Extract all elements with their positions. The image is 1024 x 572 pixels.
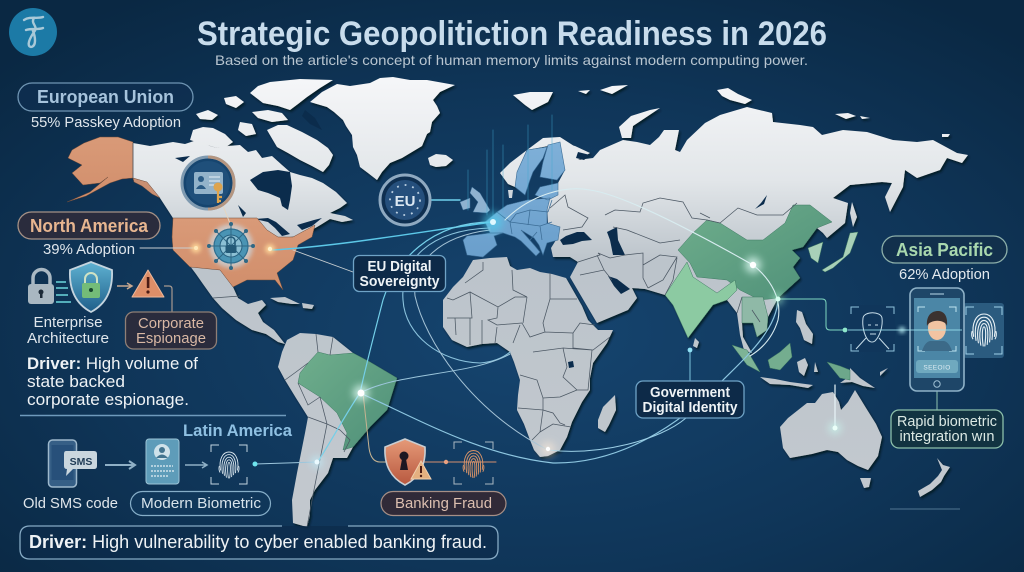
text: North America driver: corporate espionage. (27, 390, 189, 409)
stat: 62% Adoption: 62% Adoption (899, 266, 990, 283)
subtitle: Based on the article's concept of human memory limits against modern computing power. (215, 52, 808, 68)
borders: Europe (490, 200, 552, 240)
icon: EU badge: EU (395, 193, 415, 210)
land: Africa (443, 257, 613, 457)
highlighted regions (67, 137, 315, 290)
node: South China (773, 294, 783, 304)
line: North America to EU (272, 222, 492, 250)
land: South America (278, 333, 397, 527)
land: Arctic islands (190, 79, 333, 172)
box: Rapid biometric integration: Rapid biometric (897, 413, 997, 430)
water: Kola White Sea (576, 152, 590, 160)
water: Lake Baikal (755, 195, 767, 209)
node: face scan dot (843, 328, 847, 332)
region: European Union (463, 142, 565, 257)
region: Sumatra (732, 345, 760, 372)
panel: Latin America (20, 421, 506, 559)
water overlays (175, 110, 767, 368)
region: Borneo (768, 343, 792, 370)
pill: Banking Fraud (381, 492, 506, 516)
node: China (745, 257, 761, 273)
node: South Africa (541, 442, 555, 456)
box: Corporate Espionage: Corporate (138, 315, 204, 332)
land: Canada (133, 140, 353, 237)
box: Rapid biometric integration: integration wın (900, 428, 994, 445)
land: Mexico and Central America (190, 266, 285, 344)
water: Persian Gulf (608, 276, 630, 294)
line: Government Digital Identity to dot (689, 350, 691, 381)
label: Old SMS code: Old SMS code (23, 495, 118, 512)
region: India (665, 262, 737, 338)
line: EU badge to EU (430, 199, 460, 201)
water: Arctic channels (175, 110, 322, 184)
icon: EU badge (380, 175, 430, 225)
stat: 39% Adoption: 39% Adoption (43, 241, 135, 258)
line: Brazil to Africa (360, 354, 510, 393)
network connection lines (140, 115, 937, 464)
node: Australia (829, 422, 841, 434)
box: Latin America driver: Driver: High vulnerability to cyber enabled banking fraud. (29, 531, 487, 552)
pill: Banking Fraud: Banking Fraud (395, 495, 492, 512)
label: Latin America: Latin America (183, 421, 293, 440)
panel: North America (18, 212, 216, 409)
water: Caspian Sea (607, 227, 625, 255)
label box: Government Digital Identity (636, 381, 744, 418)
icon: orange fingerprint (454, 442, 493, 484)
node: South America (311, 456, 323, 468)
region: Denmark (508, 190, 513, 198)
line: phone to rapid integration (936, 391, 938, 410)
icon: passkey ID card and key (182, 157, 234, 209)
pill: European Union (18, 83, 193, 111)
stat: 55% Passkey Adoption: 55% Passkey Adoption (31, 114, 181, 131)
arrow: SMS to biometric (105, 461, 135, 469)
region: China (678, 205, 832, 300)
scan beam glow (899, 327, 905, 333)
icon: fingerprint panel (963, 303, 1004, 358)
land: Eurasia (547, 107, 968, 353)
line: US to EU Digital Sovereignty box (293, 250, 353, 272)
water: Lake Victoria (568, 361, 574, 368)
region: British Isles (460, 187, 490, 213)
land: Indonesia and New Guinea (760, 358, 888, 388)
land: Greenland (310, 77, 455, 180)
label box: EU Digital Sovereignty (354, 256, 446, 292)
borders: North America (133, 143, 240, 298)
land: Philippines (796, 310, 813, 344)
world map (67, 77, 968, 527)
icon: shield (70, 262, 112, 312)
beams: northern Europe (468, 115, 552, 215)
text: North America driver: state backed (27, 372, 125, 391)
icon: phone with biometric face (910, 288, 964, 391)
label: Enterprise Architecture: Enterprise (34, 314, 102, 331)
icon: phone with biometric face: SEEOIO (923, 364, 951, 372)
land: Novaya Zemlya (619, 108, 660, 138)
line: China to face scan (778, 299, 846, 330)
land: Russian Arctic islands (578, 85, 950, 137)
icon: banking fraud shield (385, 439, 431, 485)
land: New Zealand (918, 458, 950, 497)
label: Asia Pacific: Asia Pacific (896, 240, 993, 260)
icon: network lock (207, 222, 255, 270)
region: United States (172, 218, 315, 290)
label box: Government Digital Identity: Government (650, 385, 730, 401)
connector: warning to corporate espionage (164, 286, 172, 312)
icon: padlock (28, 270, 71, 304)
line: EU to South Africa (415, 230, 548, 450)
decorative underline glow (890, 508, 960, 510)
water: Great Lakes and Saint Lawrence (238, 205, 322, 236)
node: Brazil hub (353, 385, 369, 401)
panel: Asia Pacific (848, 236, 1007, 448)
line: Banking Fraud to fingerprint (424, 461, 496, 463)
land: Cuba and Caribbean (270, 297, 314, 309)
land: Norway and Kola (500, 137, 574, 187)
label box: EU Digital Sovereignty: EU Digital (368, 258, 432, 275)
line: EU to China arc (505, 189, 779, 356)
scan beam (848, 329, 962, 331)
region: New Guinea west (827, 362, 850, 380)
icon: phone with SMS bubble: SMS (70, 456, 92, 468)
line: EU to South America (317, 222, 492, 463)
region: Korea and Japan (808, 232, 858, 272)
water: Hudson Bay (250, 170, 292, 210)
label box: EU Digital Sovereignty: Sovereignty (360, 273, 440, 290)
line: South America to fingerprint (255, 462, 317, 464)
water: Black Sea (560, 232, 592, 245)
region: Alaska panhandle (133, 178, 160, 198)
box: Latin America driver (20, 526, 498, 559)
line: Brazil to Banking Fraud (363, 393, 396, 462)
pill: North America (18, 212, 160, 239)
text: North America driver: Driver: High volume of (27, 354, 199, 373)
land: Tasmania (860, 478, 871, 488)
label: Enterprise Architecture: Architecture (27, 330, 109, 347)
box: Corporate Espionage (126, 312, 216, 349)
box: Corporate Espionage: Espionage (136, 330, 206, 347)
label: North America: North America (30, 216, 149, 236)
panel divider (20, 414, 286, 416)
pill: Modern Biometric: Modern Biometric (141, 495, 262, 512)
land: Iceland (428, 154, 453, 167)
line: South Africa to Government Identity (548, 418, 686, 451)
pill: Modern Biometric (130, 492, 270, 516)
node: Banking Fraud dot (444, 460, 448, 464)
node: US east (265, 244, 275, 254)
title: Strategic Geopolitiction Readiness in 2026 (197, 15, 827, 53)
node: EU hub (483, 212, 503, 232)
region: Southeast Asia (742, 297, 768, 337)
land: Svalbard (513, 92, 553, 110)
node: US west (191, 243, 201, 253)
line: 39% Adoption to US (140, 247, 196, 249)
icon: face scan (850, 305, 895, 352)
label: European Union: European Union (37, 87, 174, 107)
arrow: biometric to fingerprint (185, 462, 207, 468)
neutral land masses (133, 77, 968, 527)
line: EU to Gulf of Guinea (403, 228, 510, 363)
land: Sakhalin (850, 202, 857, 227)
land: Sri Lanka (693, 338, 699, 348)
line: Passkey icon to US (222, 203, 231, 226)
arrow: enterprise to warning (117, 283, 132, 289)
line: Brazil to Government Identity (360, 299, 778, 463)
line: Australia (834, 385, 836, 428)
label box: Government Digital Identity: Digital Identity (642, 400, 738, 416)
glowing nodes (191, 212, 847, 468)
logo (9, 8, 57, 56)
borders: Africa (447, 262, 610, 440)
icon: warning triangle (132, 270, 164, 297)
pill: Asia Pacific (882, 236, 1007, 263)
borders: Asia (550, 195, 797, 322)
panel: European Union (18, 83, 193, 131)
icon: phone with SMS bubble (48, 440, 97, 487)
region: Brazil (298, 352, 397, 450)
borders: South America (285, 334, 350, 527)
land: Madagascar (598, 395, 616, 432)
node: Government Identity dot (688, 348, 692, 352)
land: Australia (780, 390, 882, 470)
region: Alaska (67, 137, 133, 202)
icon: biometric ID card (146, 439, 179, 484)
icon: fingerprint (211, 445, 247, 484)
country borders (133, 143, 797, 527)
box: Rapid biometric integration (891, 410, 1003, 448)
node: Latin America fingerprint dot (252, 462, 258, 466)
